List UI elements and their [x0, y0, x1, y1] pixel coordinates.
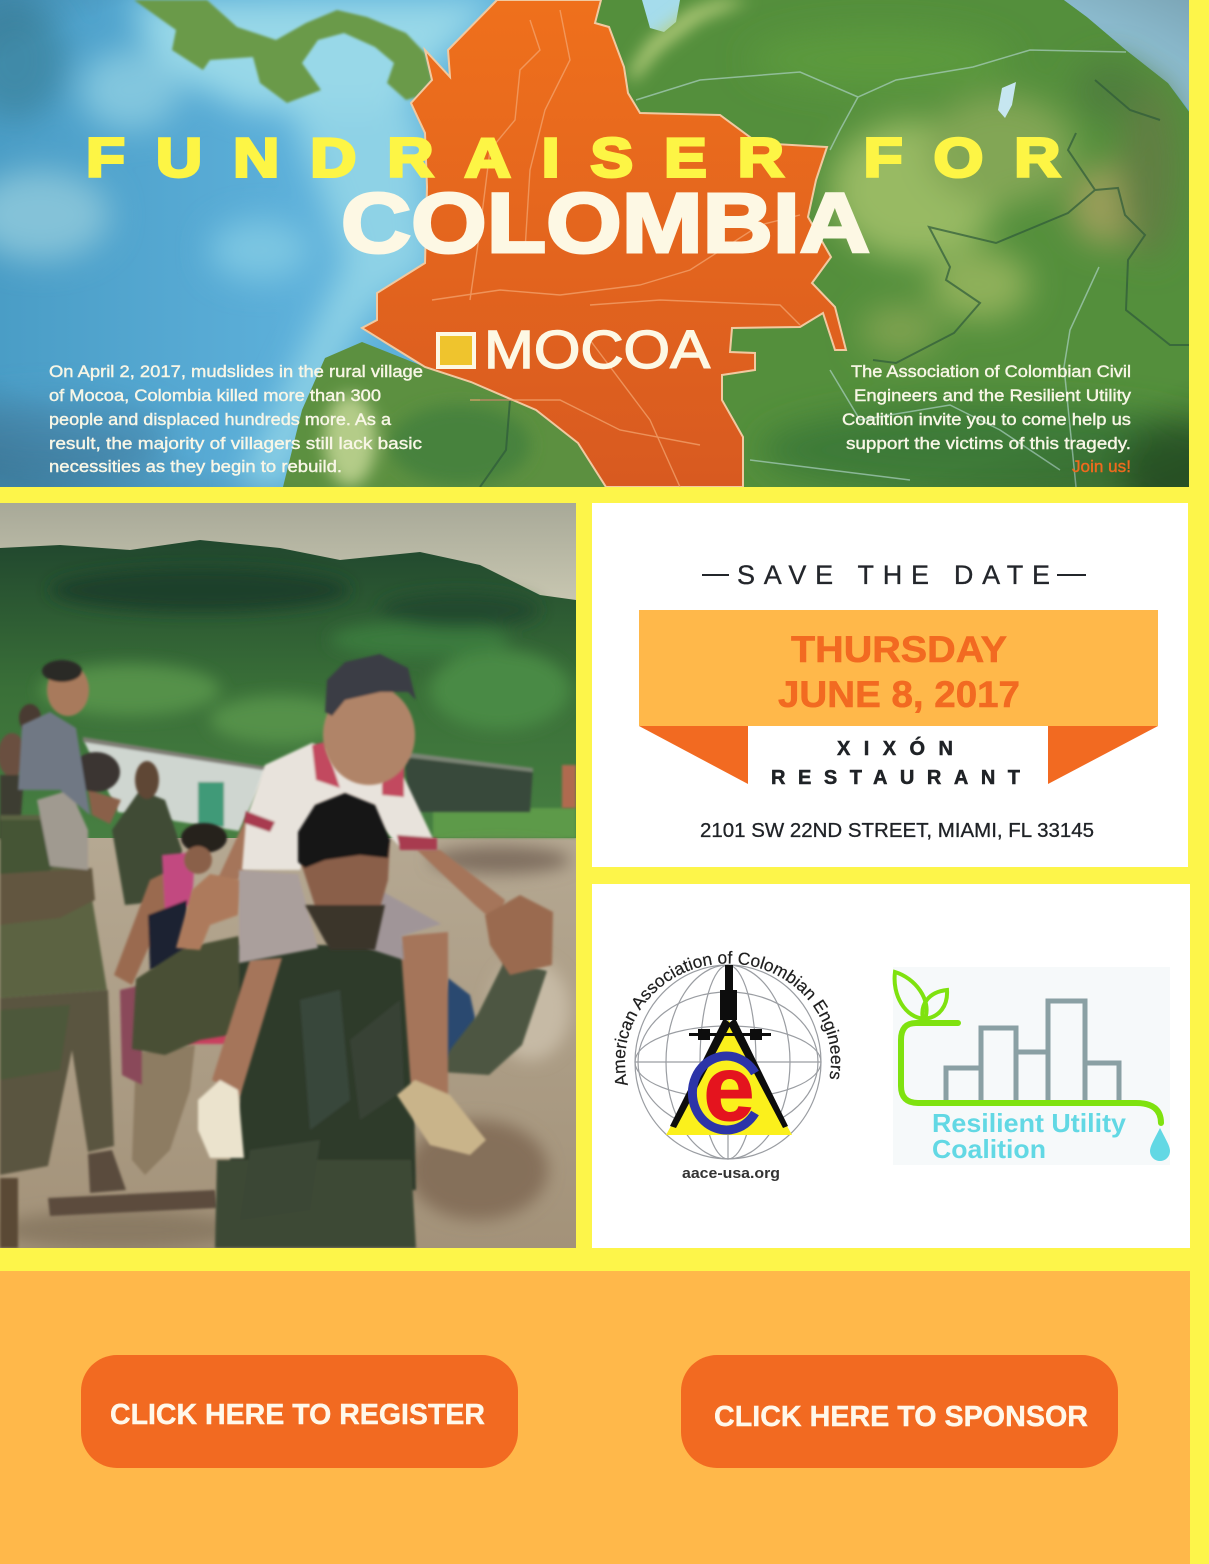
city skyline [946, 1001, 1119, 1102]
map label: mocoa: MOCOA [484, 320, 710, 380]
sea: lake maracaibo [642, 0, 680, 32]
venue name: RESTAURANT [771, 767, 1020, 789]
text block: story: necessities as they begin to rebuild. [49, 458, 342, 476]
sky [0, 503, 576, 600]
heading: fundraiser for: FUNDRAISER FOR [86, 127, 1060, 189]
child's shirt [242, 742, 437, 870]
blue bag [446, 977, 476, 1059]
text block: invitation: Join us! [1072, 458, 1131, 476]
text block: invitation: Engineers and the Resilient Utility [854, 387, 1132, 405]
heading: save the date: SAVE THE DATE [737, 560, 1050, 590]
white house [83, 737, 268, 831]
yellow triangle [666, 1020, 792, 1135]
letter c in blue [692, 1056, 755, 1130]
map artwork [0, 0, 1209, 520]
vignette [0, 0, 1189, 487]
forested hills [0, 540, 576, 840]
central soldier head [298, 793, 390, 950]
text block: story [49, 363, 423, 476]
sea: northeast atlantic [1064, 0, 1189, 110]
date banner [639, 610, 1158, 726]
logo wordmark [932, 1108, 1127, 1164]
text block: invitation: Coalition invite you to come help us [842, 411, 1131, 429]
button: sponsor [681, 1355, 1118, 1468]
terrain tones [324, 0, 1209, 520]
plank [48, 1190, 217, 1216]
address: 2101 SW 22ND STREET, MIAMI, FL 33145 [700, 820, 1094, 842]
text block: invitation: support the victims of this tragedy. [846, 435, 1131, 453]
logo: resilient utility coalition [893, 967, 1170, 1165]
grass strip [433, 808, 576, 838]
land: central america [134, 0, 432, 103]
venue name: XIXÓN [837, 736, 953, 760]
text block: invitation [842, 363, 1132, 476]
logo: american association of colombian engineers [614, 950, 840, 1182]
land: south america southwest [283, 342, 610, 487]
ribbon fold right [1048, 726, 1158, 784]
text block: invitation: The Association of Colombian Civil [851, 363, 1131, 381]
left soldier carrying child [0, 660, 126, 1248]
colombia highlighted in orange [362, 0, 846, 487]
venue name [771, 736, 1020, 789]
date text: THURSDAY [791, 629, 1007, 670]
logo wordmark: Resilient Utility [932, 1108, 1127, 1138]
plaid shorts [239, 870, 441, 963]
panel: partner logos [592, 884, 1190, 1248]
compass [670, 965, 788, 1128]
borders [480, 80, 1189, 487]
ribbon fold left [639, 726, 748, 784]
text block: story: of Mocoa, Colombia killed more than 300 [49, 387, 381, 405]
colombia rivers and relief [432, 10, 800, 487]
central soldier body and sleeves [132, 936, 547, 1248]
text block: story: people and displaced hundreds more. As a [49, 411, 392, 429]
text block: story: On April 2, 2017, mudslides in the rural village [49, 363, 423, 381]
green pipe [901, 1023, 1161, 1123]
map marker: yellow square [438, 334, 474, 367]
text block: story: result, the majority of villagers still lack basic [49, 435, 422, 453]
globe [635, 965, 821, 1159]
panel: header map [0, 0, 1209, 520]
letter e in red: e [703, 1038, 755, 1140]
muddy ground [0, 838, 576, 1248]
button: sponsor: CLICK HERE TO SPONSOR [714, 1401, 1088, 1433]
land: south america east [590, 0, 1190, 487]
panel: call to action [0, 1271, 1190, 1564]
website: aace-usa.org [682, 1165, 780, 1182]
child's limbs [198, 818, 505, 1158]
leaves [895, 972, 947, 1019]
soldier in background [112, 761, 182, 905]
date text [778, 629, 1020, 715]
date text: JUNE 8, 2017 [778, 674, 1020, 715]
water drop [1150, 1128, 1170, 1161]
heading: colombia: COLOMBIA [341, 176, 870, 270]
child's head [323, 654, 416, 785]
lake guri [998, 82, 1016, 118]
rivers on surrounding land [636, 50, 1126, 487]
mud patches [0, 846, 570, 1250]
woman in background [114, 823, 227, 1175]
people far left [0, 704, 41, 840]
panel: rescue photo [0, 503, 576, 1250]
panel: save the date [592, 503, 1188, 867]
logo wordmark: Coalition [932, 1134, 1046, 1164]
ring text: American Association of Colombian Engineers [614, 950, 840, 1086]
button: register [81, 1355, 518, 1468]
open shed [404, 752, 576, 812]
button: register: CLICK HERE TO REGISTER [110, 1399, 485, 1431]
hands [176, 874, 553, 975]
